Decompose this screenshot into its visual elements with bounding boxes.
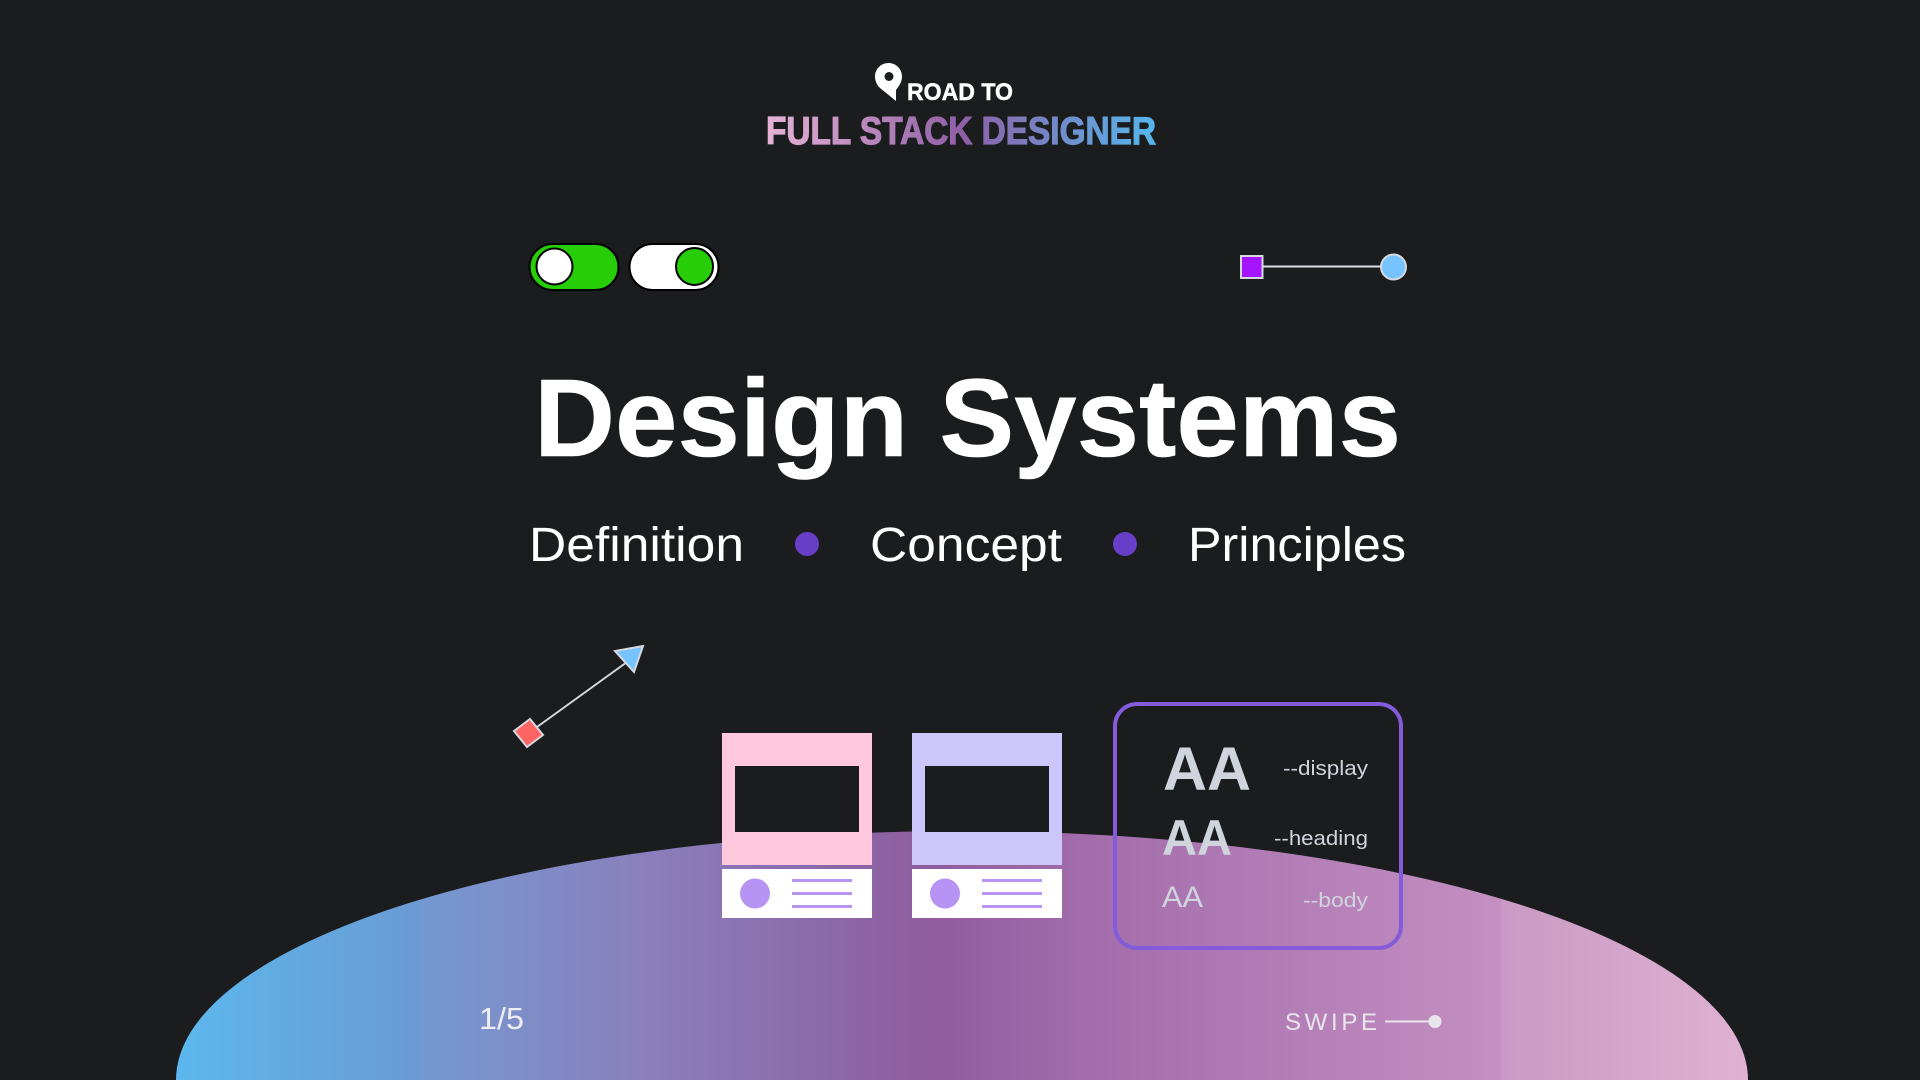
subtitle row bbox=[529, 519, 1406, 572]
heading sample: AA bbox=[1162, 810, 1232, 866]
gradient arc background bbox=[176, 831, 1748, 1080]
card: pink bbox=[722, 733, 872, 918]
panel: type scale bbox=[1115, 704, 1401, 948]
separator dot bbox=[1113, 532, 1137, 556]
toggle: on bbox=[530, 244, 618, 290]
logo: road to full stack designer bbox=[766, 63, 1156, 153]
heading label: --heading bbox=[1274, 828, 1368, 850]
display sample: AA bbox=[1163, 735, 1251, 803]
subtitle: definition: Definition bbox=[529, 519, 744, 572]
title: Design Systems bbox=[534, 357, 1401, 480]
full stack designer label: FULL STACK DESIGNER bbox=[766, 110, 1156, 153]
arrow bbox=[514, 646, 643, 747]
body sample: AA bbox=[1162, 881, 1203, 914]
connector: square to circle bbox=[1241, 254, 1406, 280]
subtitle: principles: Principles bbox=[1188, 519, 1406, 572]
subtitle: concept: Concept bbox=[870, 519, 1062, 572]
road to label: ROAD TO bbox=[907, 79, 1013, 106]
separator dot bbox=[795, 532, 819, 556]
icon: map pin bbox=[875, 63, 902, 101]
swipe indicator: SWIPE bbox=[1285, 1009, 1377, 1036]
page counter: 1/5 bbox=[479, 1001, 524, 1036]
swipe indicator bbox=[1285, 1009, 1442, 1036]
toggle: off bbox=[630, 244, 718, 290]
card: lavender bbox=[912, 733, 1062, 918]
body label: --body bbox=[1303, 890, 1368, 912]
display label: --display bbox=[1283, 758, 1368, 780]
